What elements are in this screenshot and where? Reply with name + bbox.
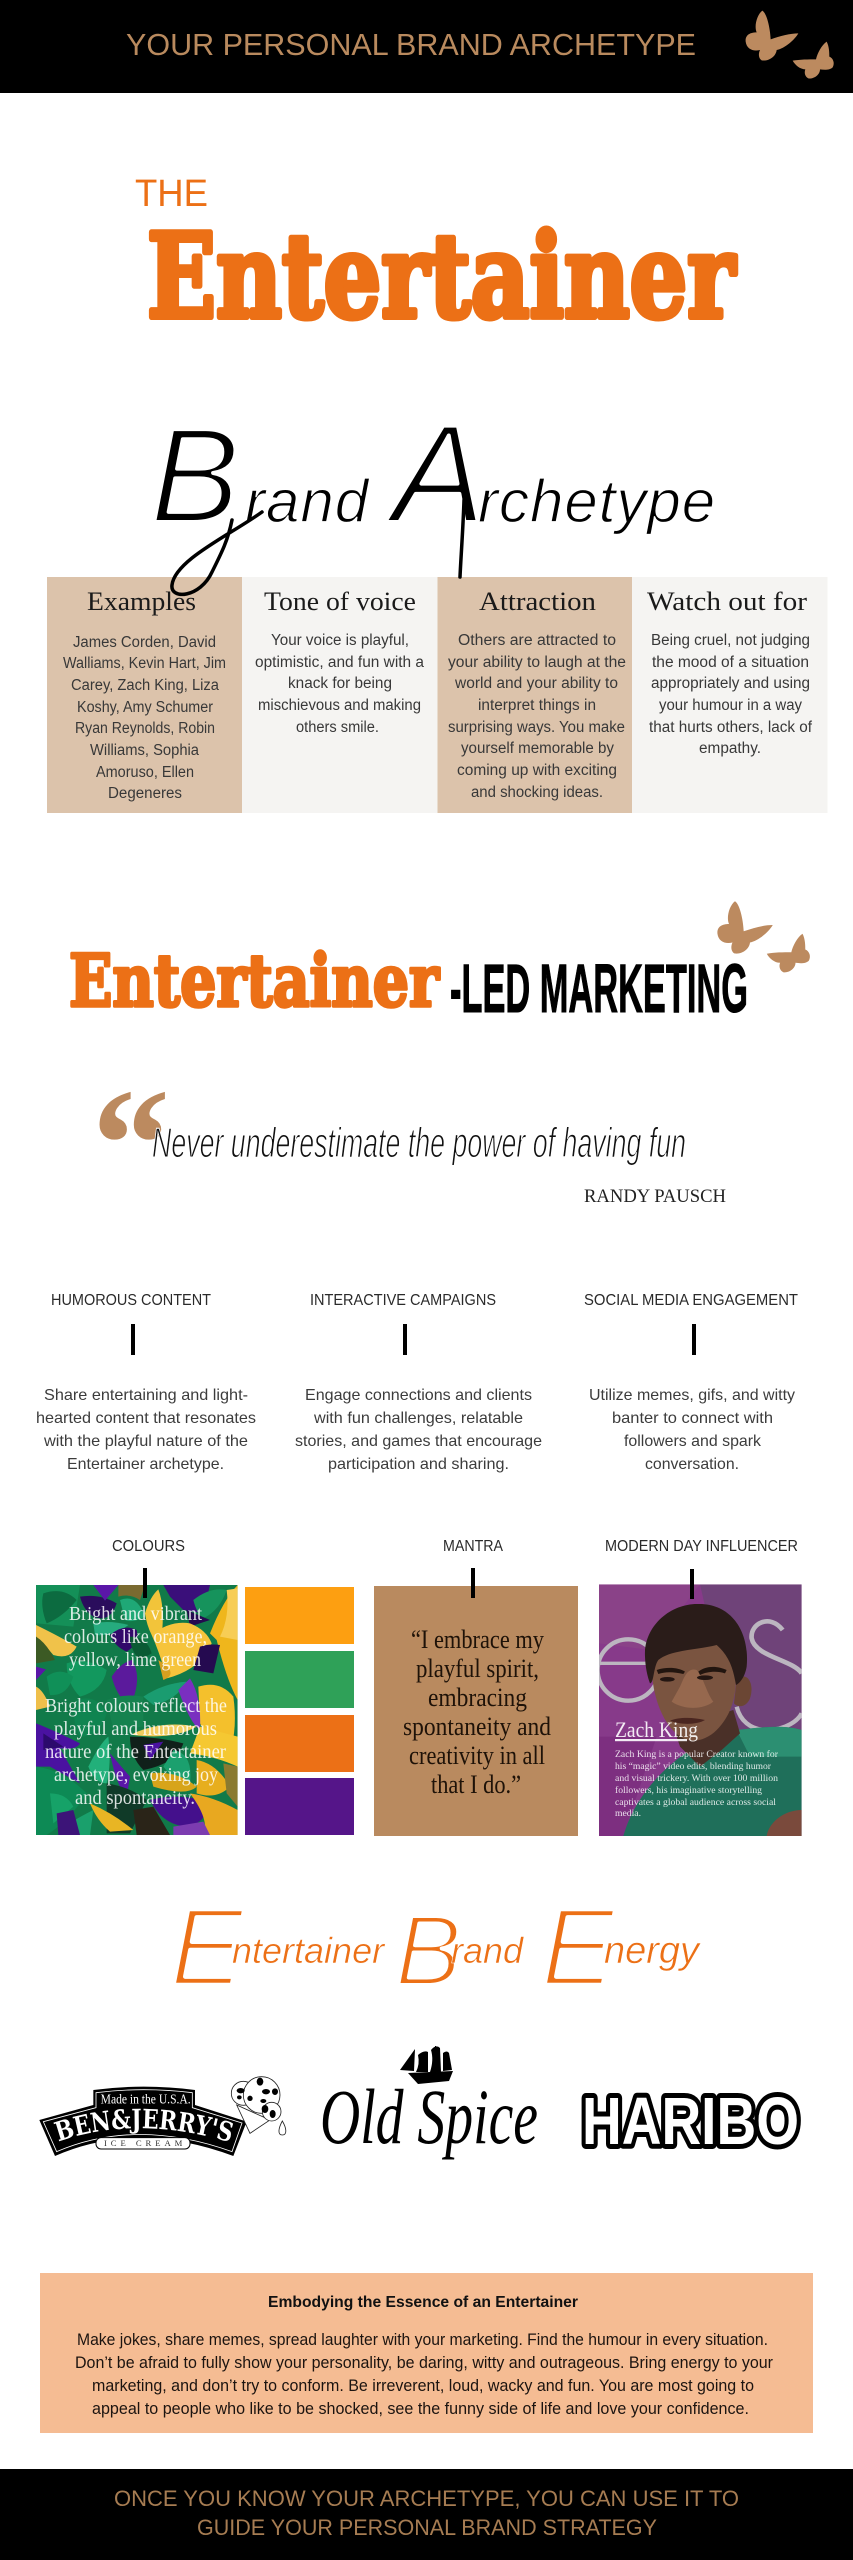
ice cream scoops [231,2077,286,2135]
influencer caption [615,1717,779,1818]
column: humorous content [36,1292,256,1473]
card: attraction: Attraction [479,587,596,616]
card: examples: Koshy, Amy Schumer [77,699,213,716]
mantra quote: “I embrace my [411,1625,544,1654]
card: examples: Degeneres [108,785,182,802]
card: watch out for [647,587,813,757]
icon: quote mark: “ [92,1057,170,1232]
card: attraction: coming up with exciting [457,762,617,779]
card: attraction: yourself memorable by [461,740,614,757]
header title: YOUR PERSONAL BRAND ARCHETYPE [126,27,696,62]
column: social media engagement: conversation. [645,1456,739,1473]
influencer caption: his “magic” video edits, blending humor [615,1761,771,1771]
card: examples: Ryan Reynolds, Robin [75,720,215,737]
column: interactive campaigns [295,1292,542,1473]
column: interactive campaigns: INTERACTIVE CAMPAIGNS [310,1292,496,1309]
mantra quote: embracing [428,1683,527,1712]
card: examples: Williams, Sophia [90,742,199,759]
panel body: marketing, and don’t try to conform. Be irreverent, loud, wacky and fun. You are most going to [92,2377,754,2395]
logos row [39,2046,801,2160]
feather panel text: archetype, evoking joy [54,1764,218,1786]
card: tone of voice: Your voice is playful, [271,632,409,649]
footer bar [0,2469,853,2560]
card: watch out for: Watch out for [647,587,807,616]
flourish: script tail over cards [172,500,464,594]
influencer caption: Zach King is a popular Creator known for [615,1749,778,1759]
mantra quote: playful spirit, [416,1654,539,1683]
feather panel text: playful and humorous [54,1718,217,1740]
icon: butterflies [717,901,810,972]
script heading: Brand Archetype: rand [245,468,387,535]
script heading: Entertainer Brand Energy [170,1886,701,2009]
influencer caption: media. [615,1808,641,1818]
columns: marketing tactics [36,1292,798,1473]
panel body [75,2331,773,2418]
influencer caption: and visual trickery. With over 100 million [615,1773,779,1783]
panel: mantra: MANTRA [443,1538,503,1555]
image: Zach King portrait [598,1584,802,1836]
mantra quote: spontaneity and [403,1712,551,1741]
card: examples: James Corden, David [73,634,216,651]
logo: Haribo: HARIBO [582,2084,799,2159]
mantra quote: that I do.” [431,1770,521,1799]
feather panel text: Bright and vibrant [69,1603,202,1625]
card: attraction: your ability to laugh at the [448,654,626,671]
column: social media engagement [584,1292,798,1473]
card: examples: Examples [87,587,196,616]
logo: Old Spice [320,2046,538,2160]
card: watch out for: Being cruel, not judging [651,632,810,649]
feather panel text: Bright colours reflect the [45,1695,227,1717]
heading: Entertainer-led marketing: Entertainer [69,938,440,1023]
panel: embodying the essence [40,2273,813,2433]
card: watch out for: that hurts others, lack of [649,719,813,736]
card: examples: Amoruso, Ellen [96,764,194,781]
card: examples [63,587,226,802]
influencer caption: followers, his imaginative storytelling [615,1785,763,1795]
card: attraction: interpret things in [478,697,596,714]
column: interactive campaigns: with fun challenges, relatable [313,1410,523,1427]
card: tone of voice [255,587,424,736]
colour swatches [245,1587,354,1835]
card: watch out for: the mood of a situation [652,654,809,671]
panel heading: Embodying the Essence of an Entertainer [268,2294,578,2311]
card: tone of voice: knack for being [288,675,392,692]
quote block [92,1057,726,1232]
script heading: Entertainer Brand Energy: E [541,1886,616,2009]
card: examples: Walliams, Kevin Hart, Jim [63,655,226,672]
footer text: GUIDE YOUR PERSONAL BRAND STRATEGY [197,2515,657,2540]
icon: butterflies [746,11,834,78]
influencer caption: Zach King [615,1717,698,1742]
column: humorous content: Share entertaining and light- [44,1387,248,1404]
icon: ship [400,2046,453,2084]
feather panel text: nature of the Entertainer [45,1741,226,1763]
panel: colours [36,1538,354,1835]
card: watch out for: appropriately and using [651,675,810,692]
column: humorous content: with the playful nature of the [43,1433,248,1450]
card: examples: Carey, Zach King, Liza [71,677,219,694]
logo: Old Spice: Old Spice [320,2073,538,2160]
panel: archetype cards [47,577,828,813]
title: The Entertainer [135,173,736,345]
column: social media engagement: followers and spark [624,1433,762,1450]
card: tone of voice: optimistic, and fun with a [255,654,424,671]
mantra quote [403,1625,551,1799]
title: The Entertainer: THE [135,173,208,215]
image: feathers [36,1585,238,1835]
script heading: Brand Archetype: rchetype [478,468,716,535]
feather panel text: yellow, lime green [69,1649,201,1671]
feather panel text: colours like orange, [64,1626,207,1648]
mantra quote: creativity in all [409,1741,545,1770]
logo: Ben & Jerry's: BEN&JERRY'S [54,2108,234,2142]
script heading: Entertainer Brand Energy: E [170,1886,245,2009]
script heading: Entertainer Brand Energy: B [395,1895,462,2007]
card: tone of voice: others smile. [296,719,379,736]
influencer caption: captivates a global audience across social [615,1797,777,1807]
panel: mantra [374,1538,578,1836]
script heading: Brand Archetype: B [150,400,240,551]
footer text: ONCE YOU KNOW YOUR ARCHETYPE, YOU CAN USE IT TO [114,2486,739,2511]
column: social media engagement: SOCIAL MEDIA ENGAGEMENT [584,1292,798,1309]
script heading: Entertainer Brand Energy: ntertainer [232,1930,394,1971]
panel body: appeal to people who like to be shocked, see the funny side of life and love your confidence. [92,2400,749,2418]
card: watch out for: your humour in a way [659,697,802,714]
logo: Ben & Jerry's: Made in the U.S.A. [101,2091,191,2106]
column: interactive campaigns: Engage connections and clients [305,1387,532,1404]
card: attraction: surprising ways. You make [448,719,625,736]
footer text [114,2486,739,2540]
card: attraction: Others are attracted to [458,632,616,649]
column: social media engagement: banter to connect with [612,1410,773,1427]
quote author: RANDY PAUSCH [584,1186,726,1207]
card: tone of voice: mischievous and making [258,697,421,714]
script heading: Brand Archetype: A [385,395,485,552]
column: humorous content: Entertainer archetype. [67,1456,224,1473]
quote text: Never underestimate the power of having fun [152,1121,686,1167]
script heading: Brand Archetype [150,395,716,552]
panel body: Make jokes, share memes, spread laughter with your marketing. Find the humour in every situation. [77,2331,768,2349]
panel: modern day influencer [598,1538,802,1836]
card: attraction: and shocking ideas. [471,784,603,801]
column: social media engagement: Utilize memes, gifs, and witty [589,1387,795,1404]
card: tone of voice: Tone of voice [264,587,416,616]
header bar [0,0,853,93]
card: watch out for: empathy. [699,740,761,757]
card: attraction: world and your ability to [454,675,618,692]
feather panel text: and spontaneity. [75,1787,195,1809]
column: interactive campaigns: stories, and games that encourage [295,1433,542,1450]
heading: Entertainer-led marketing [69,901,810,1027]
column: humorous content: hearted content that resonates [36,1410,256,1427]
column: interactive campaigns: participation and sharing. [328,1456,509,1473]
logo: Ben & Jerry's [39,2076,286,2156]
logo: Ben & Jerry's: ICE CREAM [104,2138,183,2148]
column: humorous content: HUMOROUS CONTENT [51,1292,211,1309]
feather panel text [45,1603,227,1809]
script heading: Entertainer Brand Energy: rand [451,1930,533,1971]
script heading: Entertainer Brand Energy: nergy [604,1930,701,1972]
panel: colours: COLOURS [112,1538,185,1555]
card: attraction [448,587,626,801]
panel: modern day influencer: MODERN DAY INFLUENCER [605,1538,798,1555]
panel body: Don’t be afraid to fully show your personality, be daring, witty and outrageous. Bring energy to your [75,2354,773,2372]
